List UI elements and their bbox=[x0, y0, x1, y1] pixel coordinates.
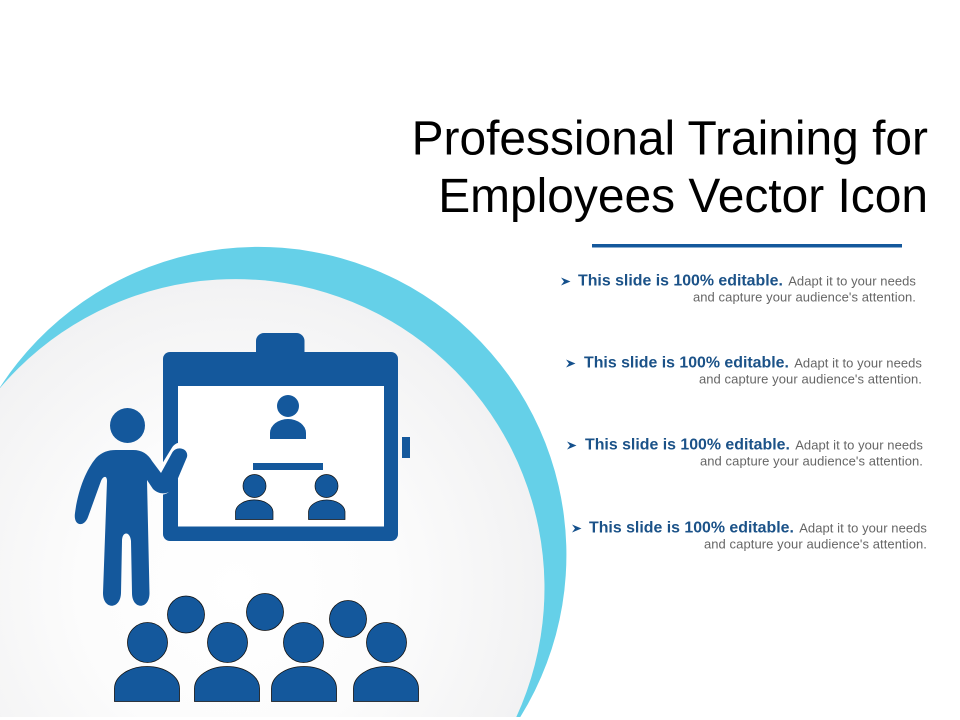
back row heads bbox=[168, 594, 366, 638]
bullet 3: and capture your audience's attention. bbox=[700, 454, 923, 468]
connector bar bbox=[253, 463, 323, 470]
bullet list bbox=[561, 272, 927, 552]
bullet 2 bbox=[566, 354, 922, 386]
bullet 4: This slide is 100% editable. bbox=[589, 520, 794, 536]
icon: presenter bbox=[75, 408, 187, 606]
bullet 1 bbox=[561, 272, 916, 304]
title bbox=[412, 112, 928, 223]
bullet 4: Adapt it to your needs bbox=[799, 520, 927, 536]
title: Professional Training for bbox=[412, 112, 928, 166]
audience member 4 bbox=[354, 622, 418, 702]
white halo around hand bbox=[162, 453, 181, 484]
title: Employees Vector Icon bbox=[438, 170, 928, 223]
bullet 3 bbox=[567, 436, 923, 468]
bullet 3: This slide is 100% editable. bbox=[585, 436, 790, 454]
bullet 2: This slide is 100% editable. bbox=[584, 354, 789, 372]
cyan crescent circle bbox=[0, 247, 566, 717]
icon: left person on board bbox=[236, 474, 273, 520]
title underline bbox=[592, 244, 902, 248]
audience member 2 bbox=[194, 622, 260, 702]
bullet 4: and capture your audience's attention. bbox=[704, 536, 927, 552]
bullet 4 bbox=[572, 520, 927, 552]
icon: presentation board bbox=[163, 333, 410, 541]
bullet 2: and capture your audience's attention. bbox=[699, 372, 922, 386]
icon: right person on board bbox=[308, 474, 345, 520]
bullet 1: and capture your audience's attention. bbox=[693, 290, 916, 304]
bullet 1: Adapt it to your needs bbox=[788, 274, 916, 288]
icon: top person on board bbox=[270, 395, 306, 439]
bullet 3: Adapt it to your needs bbox=[795, 438, 923, 452]
audience member 3 bbox=[272, 622, 336, 702]
inner grey circle bbox=[0, 279, 544, 717]
bullet 2: Adapt it to your needs bbox=[794, 356, 922, 370]
bullet 1: This slide is 100% editable. bbox=[578, 272, 783, 290]
audience member 1 bbox=[114, 622, 180, 702]
icon: audience bbox=[114, 594, 418, 702]
